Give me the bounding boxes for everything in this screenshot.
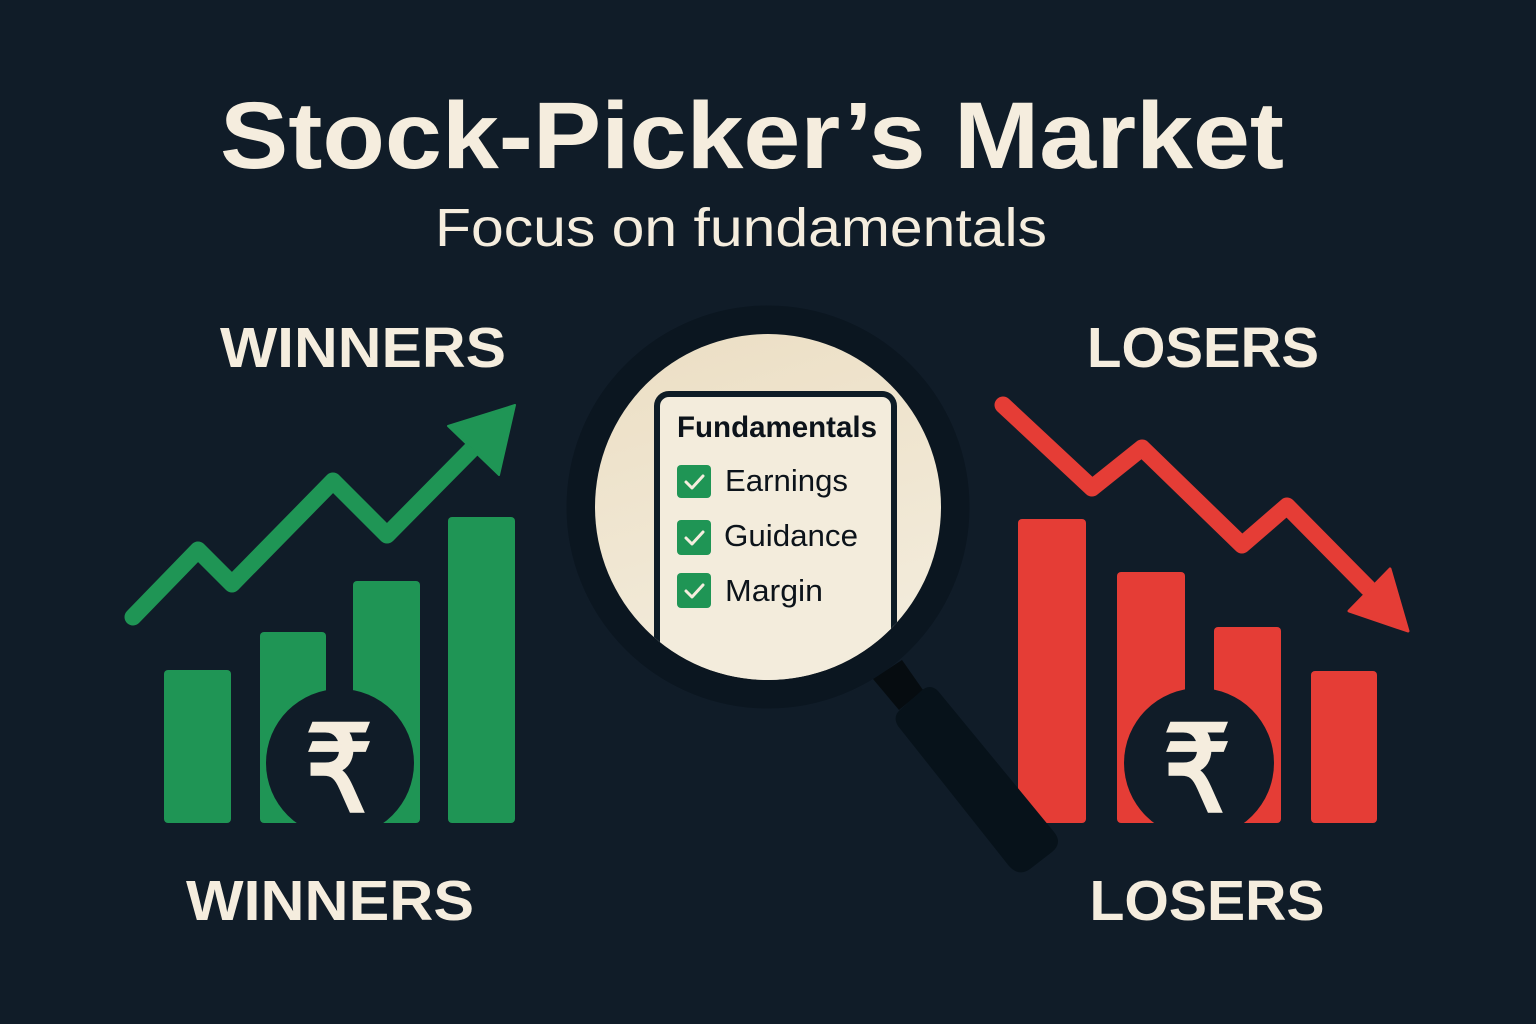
panel: winners chart — [133, 405, 515, 853]
icon: rupee badge winners — [260, 689, 430, 853]
magnifier rim — [581, 320, 955, 694]
label: losers bottom: LOSERS — [1090, 869, 1324, 933]
bar chart: winners — [164, 517, 515, 823]
bar chart: losers — [1018, 519, 1377, 823]
icon: magnifying glass — [581, 320, 1058, 872]
subtitle: Focus on fundamentals — [435, 198, 1047, 258]
item: guidance: Guidance — [724, 518, 858, 553]
checklist heading: Fundamentals — [677, 411, 877, 444]
item: margin — [677, 573, 823, 608]
icon: rupee badge losers — [1117, 688, 1287, 853]
heading: losers top: LOSERS — [1087, 316, 1319, 380]
item: earnings: Earnings — [725, 463, 848, 498]
lens — [595, 334, 941, 680]
label: winners bottom: WINNERS — [186, 869, 474, 933]
panel: fundamentals checklist — [657, 394, 894, 694]
item: guidance — [677, 518, 858, 555]
panel: losers chart — [1003, 405, 1408, 853]
title: Stock-Picker’s Market — [220, 83, 1284, 189]
icon: rupee badge winners: ₹ — [305, 703, 373, 837]
magnifier handle — [873, 660, 1058, 872]
icon: rupee badge losers: ₹ — [1163, 703, 1231, 837]
arrow: winners up — [133, 405, 515, 617]
arrow: losers down — [1003, 405, 1408, 631]
heading: winners top: WINNERS — [220, 316, 506, 380]
item: margin: Margin — [725, 573, 823, 608]
